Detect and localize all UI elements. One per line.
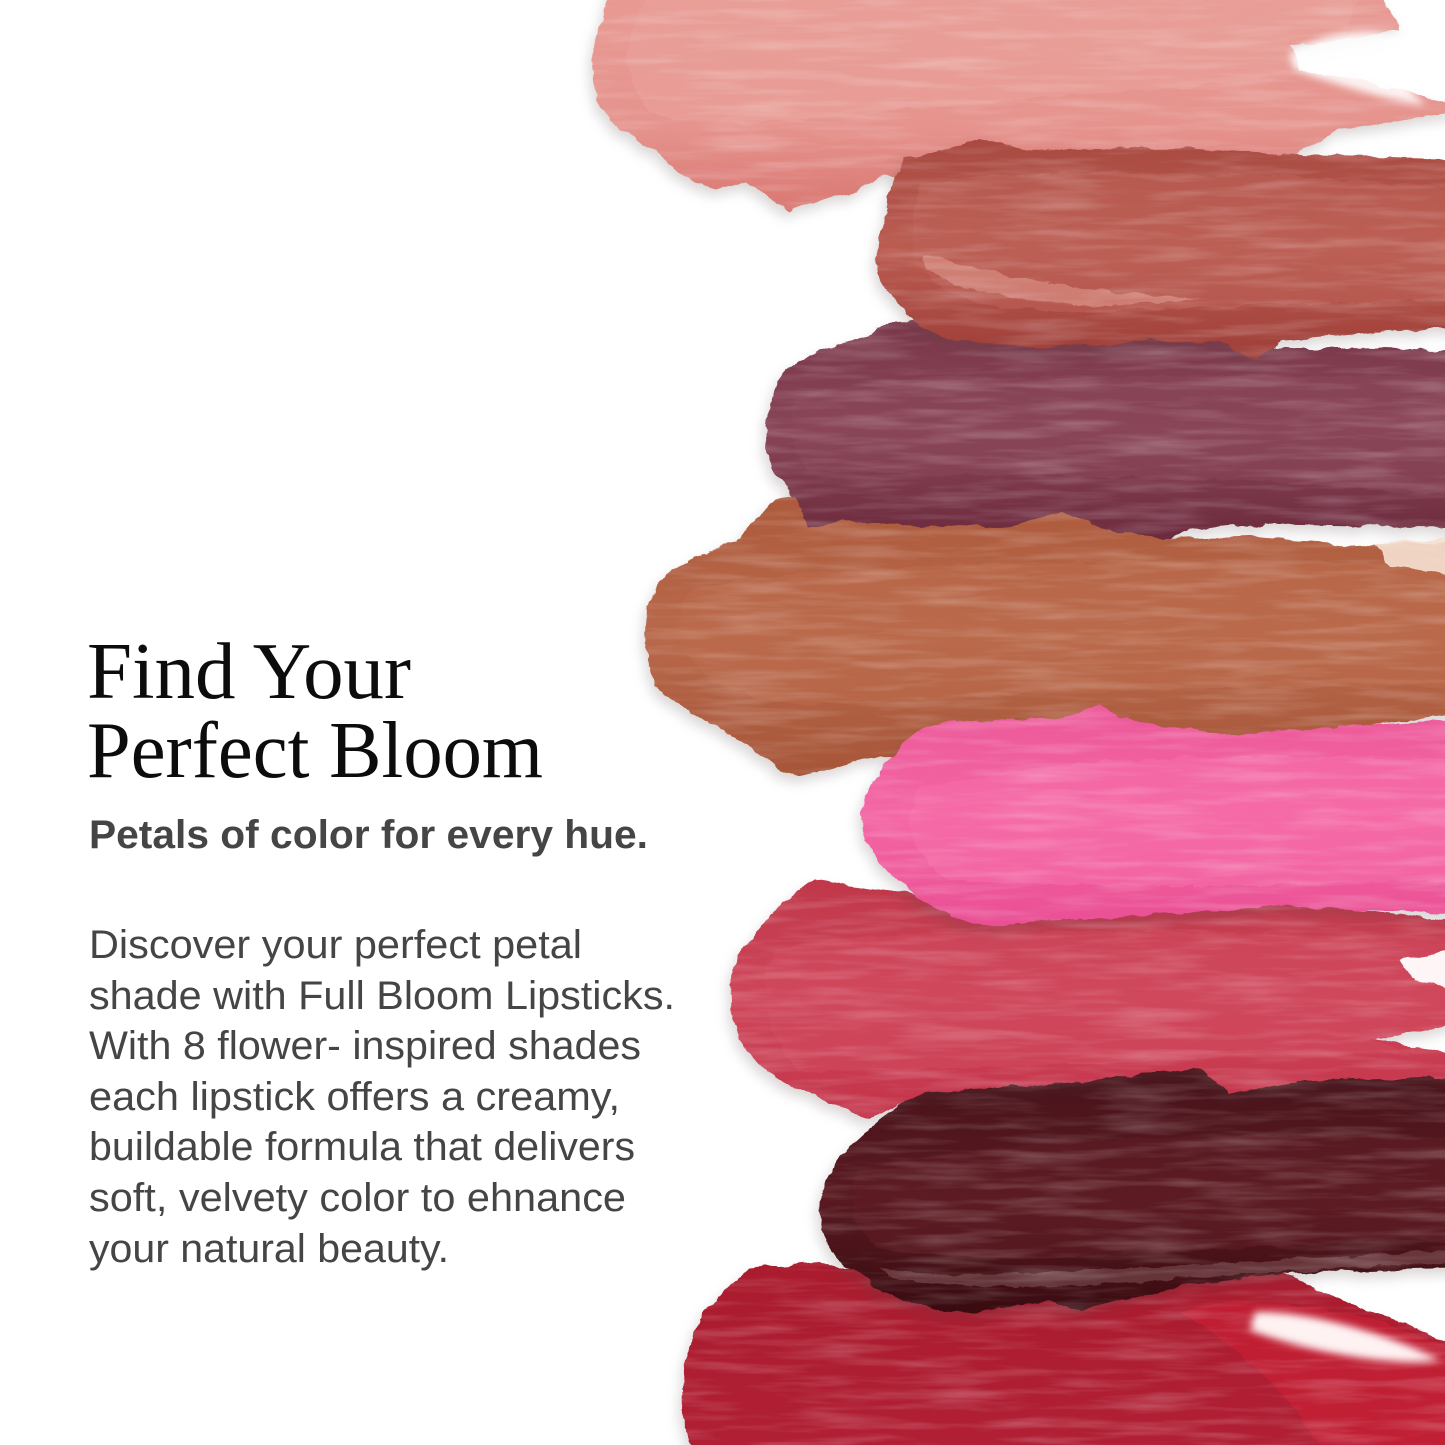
- subheading: Petals of color for every hue.: [89, 813, 648, 857]
- swatch 5: bright pink lipstick smear: [860, 705, 1445, 925]
- swatch 2: terracotta rose lipstick smear: [876, 140, 1445, 360]
- swatch 7: deep burgundy lipstick smear: [820, 1060, 1445, 1313]
- body text: [89, 923, 675, 1271]
- highlight on swatch 8: [1250, 1312, 1440, 1362]
- body text: each lipstick offers a creamy,: [89, 1075, 620, 1119]
- heading: [87, 628, 543, 795]
- swatch 6: coral red lipstick smear: [730, 878, 1445, 1118]
- swatch 8: crimson lipstick smear: [681, 1260, 1445, 1445]
- swatch 1: soft pink lipstick smear: [592, 0, 1445, 212]
- body text: buildable formula that delivers: [89, 1125, 635, 1169]
- highlight on swatch 1: [1290, 31, 1425, 105]
- body text: soft, velvety color to ehnance: [89, 1176, 626, 1220]
- swatch 3: mauve plum lipstick smear: [766, 320, 1445, 540]
- body text: your natural beauty.: [89, 1227, 449, 1271]
- body text: shade with Full Bloom Lipsticks.: [89, 974, 675, 1018]
- body text: Discover your perfect petal: [89, 923, 582, 967]
- body text: With 8 flower- inspired shades: [89, 1024, 641, 1068]
- heading: Perfect Bloom: [87, 707, 543, 795]
- heading: Find Your: [87, 628, 411, 716]
- swatch 4: caramel brown lipstick smear: [645, 497, 1445, 776]
